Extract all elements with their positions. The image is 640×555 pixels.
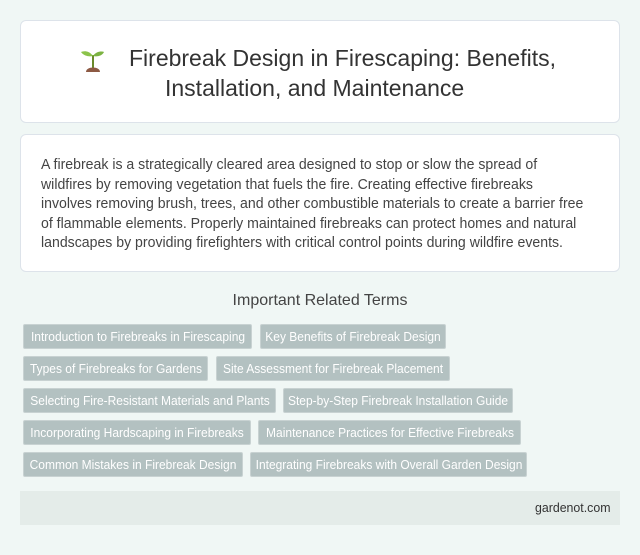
footer: gardenot.com — [534, 500, 610, 515]
tags: Types of Firebreaks for Gardens — [29, 362, 202, 376]
related terms heading: Important Related Terms — [233, 292, 407, 309]
header card — [20, 20, 620, 123]
description card — [20, 134, 620, 272]
tags: Selecting Fire-Resistant Materials and Plants — [30, 394, 269, 408]
icon: seedling — [81, 51, 104, 72]
description text: landscapes by providing firefighters with critical control points during wildfire events. — [41, 234, 563, 251]
tags: Introduction to Firebreaks in Firescaping — [30, 330, 245, 344]
tags — [23, 324, 527, 477]
description text: involves removing brush, trees, and other combustible materials to create a barrier free — [41, 195, 583, 212]
description text: of flammable elements. Properly maintained firebreaks can protect homes and natural — [41, 214, 576, 232]
tags: Site Assessment for Firebreak Placement — [223, 362, 443, 376]
description text: A firebreak is a strategically cleared area designed to stop or slow the spread of — [41, 156, 537, 173]
tags: Integrating Firebreaks with Overall Garden Design — [255, 458, 522, 472]
footer — [20, 491, 620, 525]
tags: Key Benefits of Firebreak Design — [265, 330, 441, 344]
tags: Common Mistakes in Firebreak Design — [30, 458, 236, 472]
title — [129, 45, 556, 101]
tags: Maintenance Practices for Effective Firebreaks — [266, 426, 513, 440]
title: Installation, and Maintenance — [165, 75, 464, 101]
tags: Step-by-Step Firebreak Installation Guide — [288, 394, 508, 408]
title: Firebreak Design in Firescaping: Benefits, — [129, 45, 556, 71]
description text — [41, 156, 583, 251]
tags: Incorporating Hardscaping in Firebreaks — [30, 426, 244, 440]
description text: wildfires by removing vegetation that fuels the fire. Creating effective firebreaks — [41, 176, 533, 192]
